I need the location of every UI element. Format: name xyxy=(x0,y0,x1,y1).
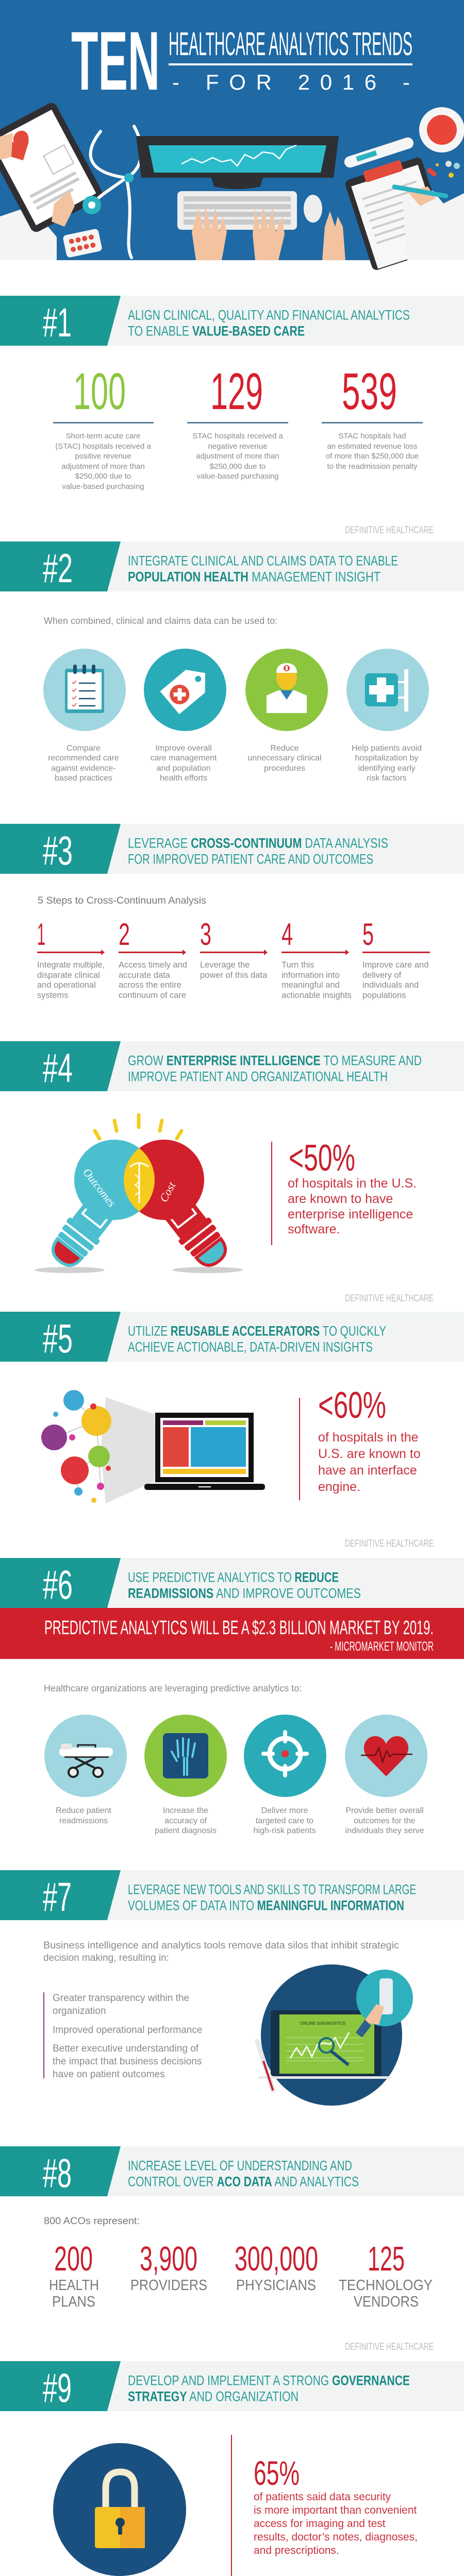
labels #2: Help patients avoid xyxy=(352,744,422,753)
list: results xyxy=(43,1992,202,2080)
intro text #7: Business intelligence and analytics tools remove data silos that inhibit strategic xyxy=(43,1940,399,1951)
stat: <50%: enterprise intelligence xyxy=(288,1207,413,1222)
source: definitive healthcare: DEFINITIVE HEALTHCARE xyxy=(345,525,434,536)
labels #6: high-risk patients xyxy=(254,1826,316,1835)
header #4: GROW ENTERPRISE INTELLIGENCE TO MEASURE AND xyxy=(128,1053,422,1069)
hero banner xyxy=(0,0,464,272)
steps with arrows: meaningful and xyxy=(281,980,340,990)
steps with arrows: 5 xyxy=(362,917,374,952)
steps with arrows: across the entire xyxy=(119,980,181,990)
ACO stats: PROVIDERS xyxy=(130,2277,207,2294)
steps with arrows: populations xyxy=(362,991,406,1000)
steps with arrows: 2 xyxy=(119,917,130,952)
header #5: UTILIZE REUSABLE ACCELERATORS TO QUICKLY xyxy=(128,1323,386,1338)
icon: medical tag xyxy=(144,649,226,731)
steps with arrows: accurate data xyxy=(119,971,171,980)
header #9: DEVELOP AND IMPLEMENT A STRONG GOVERNANCE xyxy=(128,2373,410,2388)
icon: clipboard checklist xyxy=(43,649,126,731)
stat: 100: (STAC) hospitals received a xyxy=(55,442,151,451)
labels #2: procedures xyxy=(264,764,305,773)
labels #2: identifying early xyxy=(358,764,416,773)
labels #2 xyxy=(48,744,422,783)
steps with arrows: disparate clinical xyxy=(37,971,100,980)
steps with arrows: power of this data xyxy=(200,971,268,980)
header #5 xyxy=(0,1312,464,1362)
steps with arrows: 1 xyxy=(37,917,45,952)
steps with arrows: 3 xyxy=(200,917,211,952)
list: results: have on patient outcomes xyxy=(53,2069,165,2080)
source: definitive healthcare: DEFINITIVE HEALTHCARE xyxy=(345,1538,434,1549)
stat: 65%: access for imaging and test xyxy=(254,2518,386,2530)
stat: 100: positive revenue xyxy=(75,452,131,461)
ACO stats: HEALTH xyxy=(49,2277,99,2294)
stat: <60%: have an interface xyxy=(318,1463,417,1478)
labels #6: readmissions xyxy=(59,1817,108,1825)
ACO stats: VENDORS xyxy=(354,2294,419,2310)
header #6: #6 xyxy=(43,1562,73,1607)
icon: x-ray hand xyxy=(144,1715,227,1797)
header #5: ACHIEVE ACTIONABLE, DATA-DRIVEN INSIGHTS xyxy=(128,1340,373,1355)
illustration: plate and pills xyxy=(419,107,464,178)
labels #2: unnecessary clinical xyxy=(247,754,322,762)
list: results: Better executive understanding of xyxy=(53,2043,199,2054)
header #7: #7 xyxy=(43,1874,72,1920)
labels #6: patient diagnosis xyxy=(155,1826,217,1835)
steps with arrows: continuum of care xyxy=(119,991,186,1000)
ACO stats: 3,900 xyxy=(140,2240,197,2278)
icon: padlock xyxy=(53,2443,186,2576)
illustration: tablet xyxy=(0,101,105,260)
steps with arrows: Improve care and xyxy=(362,960,428,970)
header #1: #1 xyxy=(43,299,72,345)
illustration: thermometer xyxy=(343,136,415,169)
ACO stats: PHYSICIANS xyxy=(236,2277,316,2294)
header #4 xyxy=(0,1041,464,1091)
labels #6: Deliver more xyxy=(261,1806,308,1815)
header #8: #8 xyxy=(43,2150,72,2196)
stat: <60%: engine. xyxy=(318,1480,360,1494)
header #5: #5 xyxy=(43,1315,73,1361)
header #6: READMISSIONS AND IMPROVE OUTCOMES xyxy=(128,1586,361,1601)
stat: 65% xyxy=(231,2435,418,2576)
source: definitive healthcare: DEFINITIVE HEALTHCARE xyxy=(345,2342,434,2352)
stat: 100: $250,000 due to xyxy=(75,472,131,481)
labels #2: and population xyxy=(157,764,210,773)
icon: heart pulse xyxy=(345,1715,427,1797)
stat: 65%: results, doctor’s notes, diagnoses, xyxy=(254,2531,418,2543)
labels #2: Improve overall xyxy=(155,744,212,753)
labels #2: based practices xyxy=(55,774,112,783)
steps with arrows: Access timely and xyxy=(119,960,187,970)
header #6 xyxy=(0,1558,464,1608)
steps with arrows: Turn this xyxy=(281,960,314,970)
header #9: STRATEGY AND ORGANIZATION xyxy=(128,2388,299,2404)
header #9 xyxy=(0,2361,464,2411)
illustration: light bulbs: Cost xyxy=(157,1179,178,1204)
steps with arrows: systems xyxy=(37,991,69,1000)
ACO stats: PLANS xyxy=(52,2294,95,2310)
stat: <50% xyxy=(271,1138,417,1245)
stat: 65%: of patients said data security xyxy=(254,2491,391,2503)
labels #2: recommended care xyxy=(48,754,119,762)
title: subtitle xyxy=(169,25,412,94)
steps with arrows: Integrate multiple, xyxy=(37,960,105,970)
header #9: #9 xyxy=(43,2365,72,2411)
labels #2: risk factors xyxy=(367,774,407,783)
icon: stretcher xyxy=(44,1715,127,1797)
ACO stats: 300,000 xyxy=(235,2240,318,2278)
header #3: #3 xyxy=(43,827,73,873)
ACO stats xyxy=(49,2240,433,2310)
labels #2: against evidence- xyxy=(51,764,116,773)
intro text #3: 5 Steps to Cross-Continuum Analysis xyxy=(38,895,206,906)
ACO stats: 125 xyxy=(368,2240,405,2278)
header #3: LEVERAGE CROSS-CONTINUUM DATA ANALYSIS xyxy=(128,836,388,851)
labels #6: outcomes for the xyxy=(354,1817,416,1825)
stat: 129 xyxy=(187,363,288,481)
stat: 539: STAC hospitals had xyxy=(338,432,406,440)
illustration: stethoscope xyxy=(82,126,141,258)
stat: <50%: of hospitals in the U.S. xyxy=(288,1176,417,1191)
stat: <50%: are known to have xyxy=(288,1192,393,1206)
labels #6: Provide better overall xyxy=(345,1806,424,1815)
source: definitive healthcare: DEFINITIVE HEALTHCARE xyxy=(345,1293,434,1304)
header #2 xyxy=(0,541,464,591)
ACO stats: TECHNOLOGY xyxy=(339,2277,433,2294)
title: subtitle: - FOR 2016 - xyxy=(172,70,410,94)
steps with arrows: 4 xyxy=(281,917,293,952)
icon: target xyxy=(244,1715,326,1797)
stat: 129: negative revenue xyxy=(208,442,268,451)
header #4: #4 xyxy=(43,1045,73,1091)
stat: <60%: U.S. are known to xyxy=(318,1447,421,1461)
header #8: CONTROL OVER ACO DATA AND ANALYTICS xyxy=(128,2174,359,2190)
ACO stats: 200 xyxy=(54,2240,93,2278)
illustration: online diagnostics laptop: ONLINE DIAGNOSTICS xyxy=(300,2021,346,2026)
illustration: online diagnostics laptop xyxy=(254,1964,413,2106)
illustration: light bulbs xyxy=(35,1115,243,1273)
labels #6: accuracy of xyxy=(164,1817,207,1825)
stat: 100: value-based purchasing xyxy=(62,482,144,491)
header #3 xyxy=(0,824,464,874)
stat: 539: of more than $250,000 due xyxy=(326,452,419,461)
stat: 539 xyxy=(322,363,423,471)
header #1 xyxy=(0,296,464,346)
stat: <60%: of hospitals in the xyxy=(318,1430,419,1445)
header #2: POPULATION HEALTH MANAGEMENT INSIGHT xyxy=(128,569,380,584)
header #8: INCREASE LEVEL OF UNDERSTANDING AND xyxy=(128,2158,352,2173)
header #8 xyxy=(0,2146,464,2196)
stat: 539: to the readmission penalty xyxy=(327,462,418,471)
intro text #6: Healthcare organizations are leveraging predictive analytics to: xyxy=(44,1683,302,1693)
icon: hospital sign xyxy=(346,649,429,731)
intro text #7 xyxy=(43,1940,399,1963)
stat: 100 xyxy=(53,363,154,491)
illustration: monitor xyxy=(136,136,339,189)
stat: 129: $250,000 due to xyxy=(210,462,266,471)
list: results: Improved operational performance xyxy=(53,2025,202,2036)
labels #2: hospitalization by xyxy=(355,754,418,762)
icon: doctor xyxy=(245,649,328,731)
illustration: laptop with data bubbles xyxy=(41,1390,265,1503)
labels #2: Reduce xyxy=(270,744,299,753)
labels #2: health efforts xyxy=(160,774,207,783)
header #2: #2 xyxy=(43,545,73,591)
stat: 129: value-based purchasing xyxy=(196,472,279,481)
labels #2: Compare xyxy=(67,744,101,753)
steps with arrows: Leverage the xyxy=(200,960,250,970)
stat: 100: Short-term acute care xyxy=(65,432,141,440)
labels #6: individuals they serve xyxy=(345,1826,424,1835)
steps with arrows: individuals and xyxy=(362,980,419,990)
illustration: keyboard xyxy=(177,191,322,230)
stat: <50%: <50% xyxy=(289,1138,355,1179)
steps with arrows: and operational xyxy=(37,980,96,990)
stat: 129: STAC hospitals received a xyxy=(192,432,283,440)
header #1: TO ENABLE VALUE-BASED CARE xyxy=(128,324,305,339)
illustration: clipboard xyxy=(343,154,450,272)
stat: 65%: is more important than convenient xyxy=(254,2504,417,2516)
stat: <60% xyxy=(299,1385,421,1500)
title: TEN: TEN xyxy=(71,14,160,108)
stat: 100: adjustment of more than xyxy=(61,462,145,471)
header #4: IMPROVE PATIENT AND ORGANIZATIONAL HEALTH xyxy=(128,1069,388,1084)
list: results: organization xyxy=(53,2006,106,2016)
list: results: Greater transparency within the xyxy=(53,1993,189,2004)
steps with arrows: delivery of xyxy=(362,971,402,980)
steps with arrows xyxy=(37,917,430,1000)
header #3: FOR IMPROVED PATIENT CARE AND OUTCOMES xyxy=(128,851,373,867)
stat: 65%: 65% xyxy=(254,2454,300,2492)
labels #6: Reduce patient xyxy=(56,1806,111,1815)
stat: 539: 539 xyxy=(342,363,397,420)
intro text #2: When combined, clinical and claims data can be used to: xyxy=(44,616,277,626)
intro text #7: decision making, resulting in: xyxy=(43,1953,169,1963)
stat: <50%: software. xyxy=(288,1222,340,1236)
list: results: the impact that business decisions xyxy=(53,2056,202,2067)
illustration: light bulbs: Outcomes xyxy=(80,1166,119,1209)
stat: 129: 129 xyxy=(210,363,263,420)
labels #6: Increase the xyxy=(163,1806,208,1815)
labels #6 xyxy=(56,1806,424,1835)
stat: 100: 100 xyxy=(73,363,126,420)
steps with arrows: information into xyxy=(281,971,340,980)
stat: 129: adjustment of more than xyxy=(196,452,279,461)
header #7: VOLUMES OF DATA INTO MEANINGFUL INFORMATION xyxy=(128,1898,404,1913)
header #6: USE PREDICTIVE ANALYTICS TO REDUCE xyxy=(128,1569,339,1585)
illustration: hands xyxy=(192,205,345,260)
labels #6: targeted care to xyxy=(256,1817,313,1825)
labels #2: care management xyxy=(151,754,217,762)
stat: <60%: <60% xyxy=(318,1385,386,1426)
stat: 539: an estimated revenue loss xyxy=(327,442,418,451)
stat: 65%: and prescriptions. xyxy=(254,2545,339,2556)
header #7 xyxy=(0,1870,464,1920)
intro text #8: 800 ACOs represent: xyxy=(44,2216,140,2227)
steps with arrows: actionable insights xyxy=(281,991,352,1000)
illustration: pill blister xyxy=(62,228,103,258)
banner: predictive analytics market xyxy=(0,1608,464,1659)
